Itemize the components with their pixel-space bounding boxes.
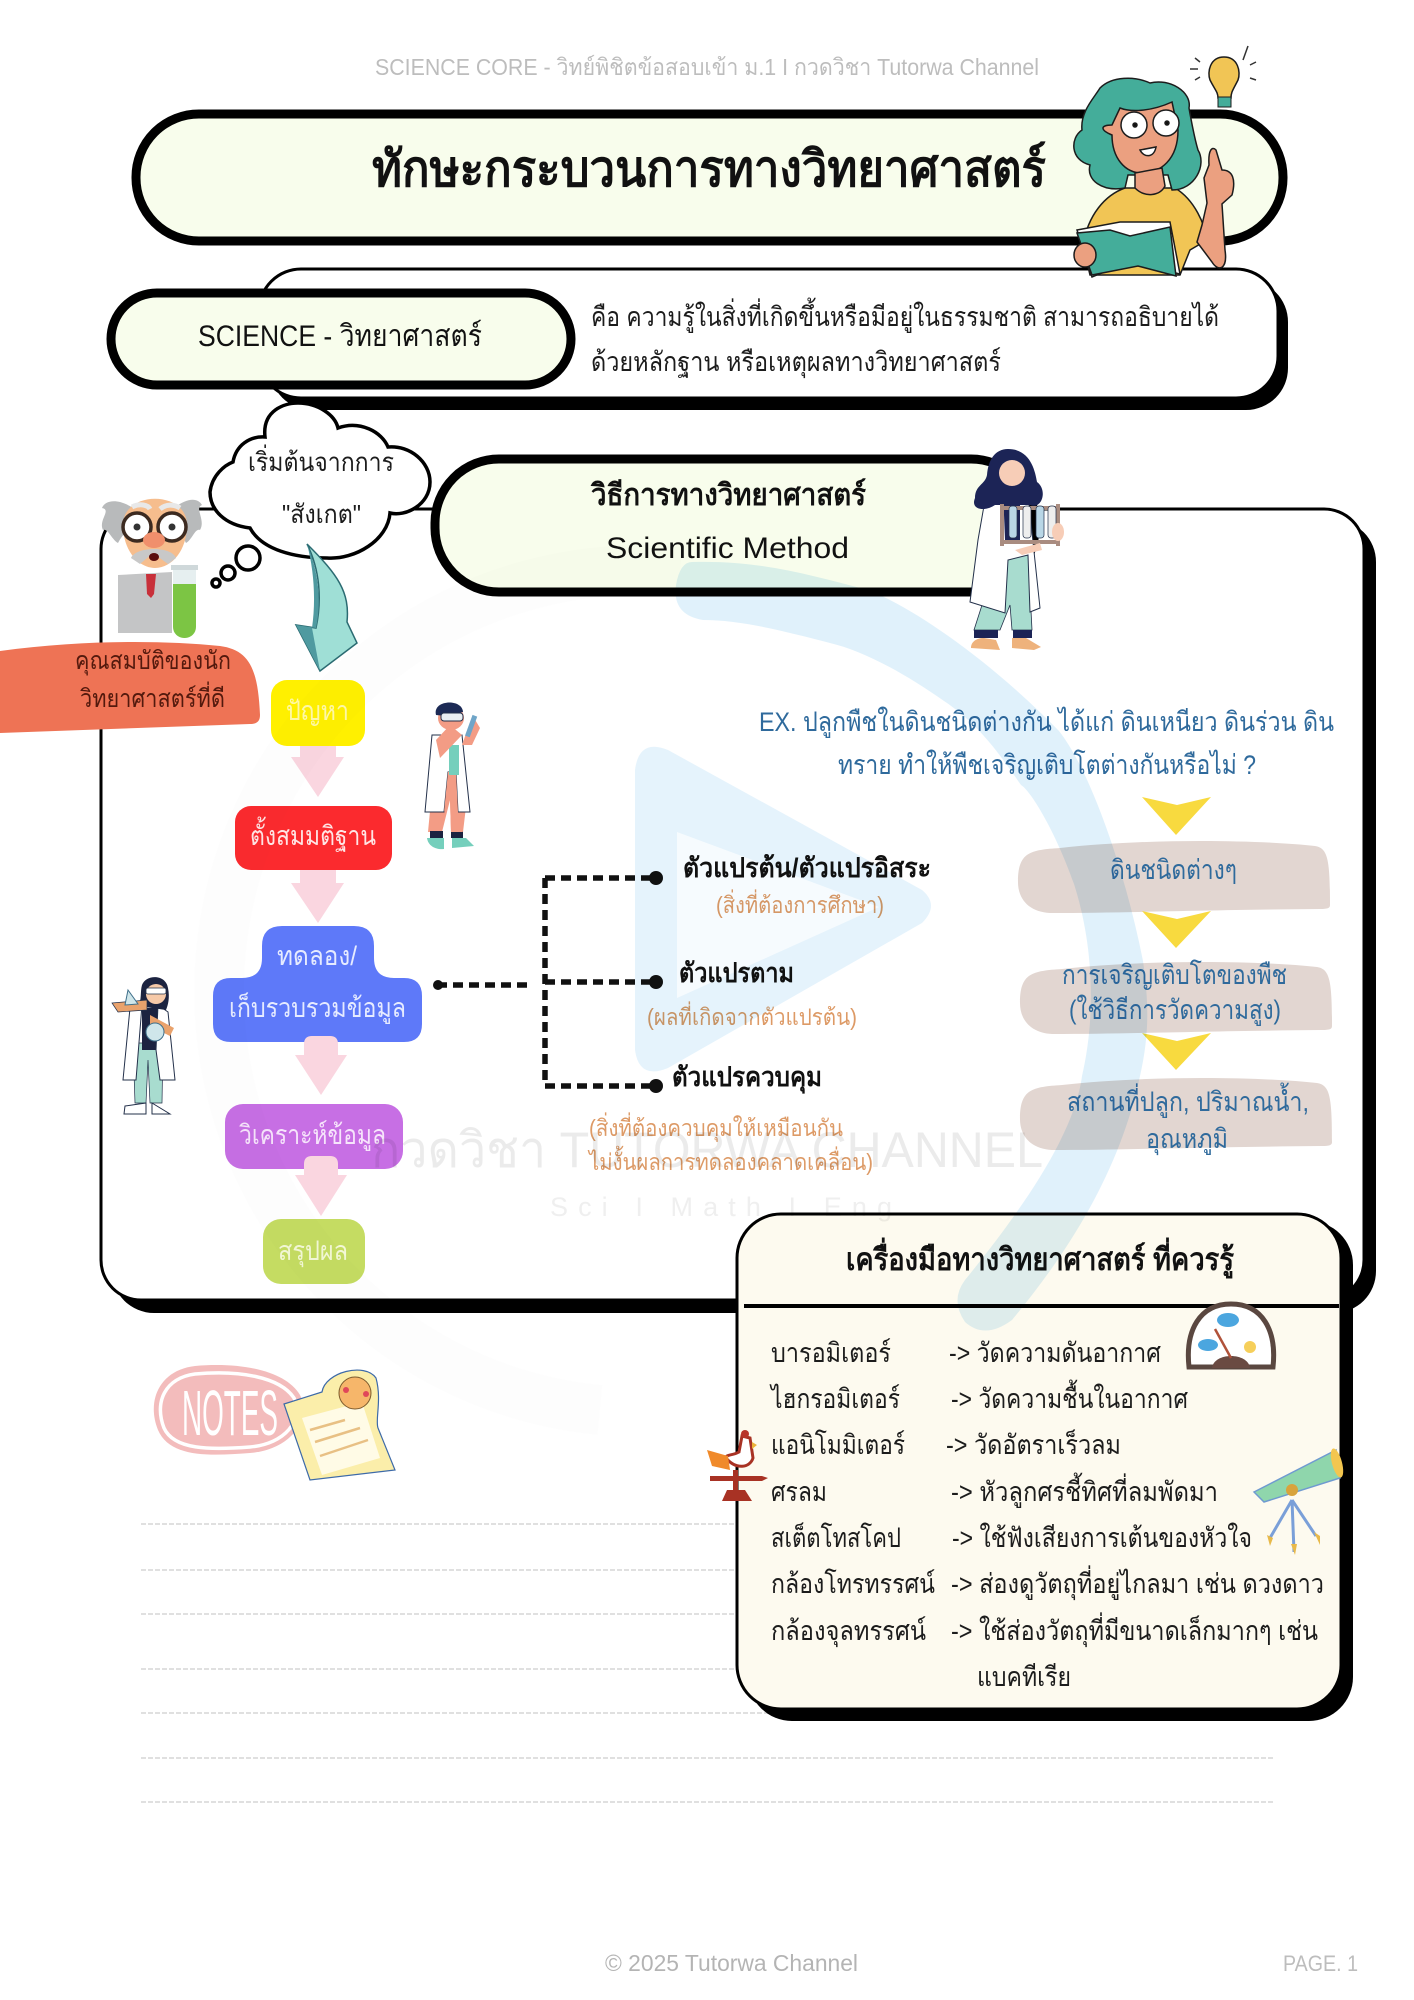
watermark play triangle <box>635 747 931 1071</box>
bubble text: "สังเกต" <box>282 499 361 529</box>
step: experiment: เก็บรวบรวมข้อมูล <box>229 990 406 1024</box>
box: soil types: ดินชนิดต่างๆ <box>1110 855 1237 885</box>
example question: EX. ปลูกพืชในดินชนิดต่างกัน ได้แก่ ดินเหนียว ดินร่วน ดิน <box>759 706 1334 738</box>
tools list: -> ส่องดูวัตถุที่อยู่ไกลมา เช่น ดวงดาว <box>951 1565 1324 1601</box>
arrow: down 3 <box>295 1036 347 1095</box>
flow chart: scientific steps <box>213 680 422 1284</box>
step: hypothesis: ตั้งสมมติฐาน <box>250 816 376 852</box>
scientific method heading pill: วิธีการทางวิทยาศาสตร์ <box>590 478 866 512</box>
title: ทักษะกระบวนการทางวิทยาศาสตร์ <box>372 141 1046 197</box>
icon: girl with book <box>1074 78 1234 277</box>
watermark <box>219 562 1147 1410</box>
bubble text <box>248 444 394 529</box>
footer copyright: © 2025 Tutorwa Channel <box>605 1950 858 1976</box>
panel: scientific method <box>101 509 1376 1313</box>
notes ruled lines <box>141 1524 1274 1802</box>
dependent variable: ตัวแปรตาม <box>679 958 794 988</box>
controlled variable: (สิ่งที่ต้องควบคุมให้เหมือนกัน <box>589 1112 843 1142</box>
tools list: ศรลม <box>771 1477 827 1507</box>
icon: professor <box>102 499 202 638</box>
step: problem: ปัญหา <box>286 696 349 726</box>
example chain <box>1018 797 1332 1156</box>
tools list: -> วัดความดันอากาศ <box>949 1338 1161 1368</box>
panel: science definition <box>259 269 1288 410</box>
arrow: yellow chevron 3 <box>1142 1033 1211 1070</box>
tools list: แบคทีเรีย <box>977 1662 1071 1692</box>
tools list <box>769 1337 1324 1692</box>
icon: scientist holding test tube <box>425 703 480 849</box>
scientific method heading pill <box>435 459 1035 592</box>
icon: scientist with flask <box>112 977 175 1114</box>
diagram: dotted connectors <box>433 871 663 1093</box>
panel: science tools <box>737 1214 1353 1721</box>
icon: telescope <box>1254 1447 1346 1555</box>
variable labels <box>587 853 931 1175</box>
arrow: down 1 <box>291 746 344 797</box>
icon: rooster weather vane <box>707 1430 768 1501</box>
icon: notes paper with sun <box>284 1370 395 1480</box>
scientific method heading pill: Scientific Method <box>606 532 849 565</box>
box: soil types <box>1018 841 1330 913</box>
page number: PAGE. 1 <box>1283 1951 1358 1976</box>
box: controlled factors: อุณหภูมิ <box>1146 1124 1228 1156</box>
title banner <box>136 114 1283 241</box>
science heading pill: SCIENCE - วิทยาศาสตร์ <box>198 319 482 353</box>
controlled variable: ไม่งั้นผลการทดลองคลาดเคลื่อน) <box>587 1146 873 1175</box>
science heading pill <box>111 293 571 385</box>
dependent variable <box>647 958 857 1030</box>
box: plant growth: การเจริญเติบโตของพืช <box>1062 960 1287 990</box>
tools list: สเต็ตโทสโคป <box>771 1520 901 1553</box>
thought bubble <box>210 403 430 587</box>
independent variable: ตัวแปรต้น/ตัวแปรอิสระ <box>683 853 931 883</box>
step: experiment: ทดลอง/ <box>277 941 357 971</box>
box: controlled factors: สถานที่ปลูก, ปริมาณน้ำ, <box>1067 1082 1309 1118</box>
box: controlled factors <box>1020 1078 1332 1156</box>
notes badge: NOTES <box>182 1377 278 1449</box>
step: analyse <box>225 1104 403 1169</box>
tools list: -> วัดความชื้นในอากาศ <box>951 1379 1188 1414</box>
step: conclusion: สรุปผล <box>278 1236 348 1268</box>
header line: SCIENCE CORE - วิทย์พิชิตข้อสอบเข้า ม.1 I กวดวิชา Tutorwa Channel <box>375 54 1039 80</box>
tools list: -> วัดอัตราเร็วลม <box>946 1427 1121 1460</box>
tools list: กล้องจุลทรรศน์ <box>771 1615 926 1648</box>
tools heading: เครื่องมือทางวิทยาศาสตร์ ที่ควรรู้ <box>846 1237 1234 1279</box>
box: plant growth <box>1020 960 1332 1034</box>
independent variable: (สิ่งที่ต้องการศึกษา) <box>716 889 884 918</box>
arrow: yellow chevron 1 <box>1142 797 1211 835</box>
arrow: curved teal <box>296 544 357 671</box>
tools list: ไฮกรอมิเตอร์ <box>769 1383 900 1414</box>
independent variable <box>683 853 931 918</box>
watermark subtitle: Sci I Math I Eng <box>550 1192 892 1222</box>
arrow: down 2 <box>291 870 344 923</box>
tools list: -> ใช้ส่องวัตถุที่มีขนาดเล็กมากๆ เช่น <box>951 1612 1318 1648</box>
tools list: แอนิโมมิเตอร์ <box>771 1429 905 1460</box>
step: problem <box>271 680 365 746</box>
icon: lightbulb <box>1190 46 1256 107</box>
watermark arc <box>676 562 1147 1331</box>
arrow: down 4 <box>295 1156 347 1216</box>
controlled variable <box>587 1062 873 1175</box>
tools list: -> ใช้ฟังเสียงการเต้นของหัวใจ <box>952 1522 1252 1553</box>
callout: good scientist qualities: วิทยาศาสตร์ที่ดี <box>80 681 225 713</box>
definition text <box>591 297 1219 379</box>
tools list: -> หัวลูกศรชี้ทิศที่ลมพัดมา <box>951 1472 1218 1508</box>
icon: barometer <box>1188 1304 1274 1368</box>
dependent variable: (ผลที่เกิดจากตัวแปรต้น) <box>647 1001 857 1030</box>
arrow: yellow chevron 2 <box>1142 911 1211 948</box>
example question <box>759 706 1334 780</box>
step: hypothesis <box>235 806 392 870</box>
definition text: คือ ความรู้ในสิ่งที่เกิดขึ้นหรือมีอยู่ในธรรมชาติ สามารถอธิบายได้ <box>591 297 1219 333</box>
box: plant growth: (ใช้วิธีการวัดความสูง) <box>1069 994 1281 1026</box>
step: analyse: วิเคราะห์ข้อมูล <box>239 1119 386 1151</box>
definition text: ด้วยหลักฐาน หรือเหตุผลทางวิทยาศาสตร์ <box>591 346 1001 379</box>
icon: scientist with rack of tubes <box>970 449 1064 650</box>
tools list: บารอมิเตอร์ <box>771 1337 891 1368</box>
step: conclusion <box>263 1219 365 1284</box>
watermark ring <box>219 570 680 1410</box>
callout: good scientist qualities: คุณสมบัติของนัก <box>75 647 231 676</box>
tools list: กล้องโทรทรรศน์ <box>771 1568 935 1599</box>
example question: ทราย ทำให้พืชเจริญเติบโตต่างกันหรือไม่ ? <box>838 749 1256 780</box>
controlled variable: ตัวแปรควบคุม <box>672 1062 822 1094</box>
watermark text: กวดวิชา TUTORWA CHANNEL <box>371 1122 1043 1178</box>
step: experiment <box>213 926 422 1042</box>
notes badge <box>154 1365 303 1455</box>
bubble text: เริ่มต้นจากการ <box>248 444 394 477</box>
callout: good scientist qualities <box>0 642 260 733</box>
